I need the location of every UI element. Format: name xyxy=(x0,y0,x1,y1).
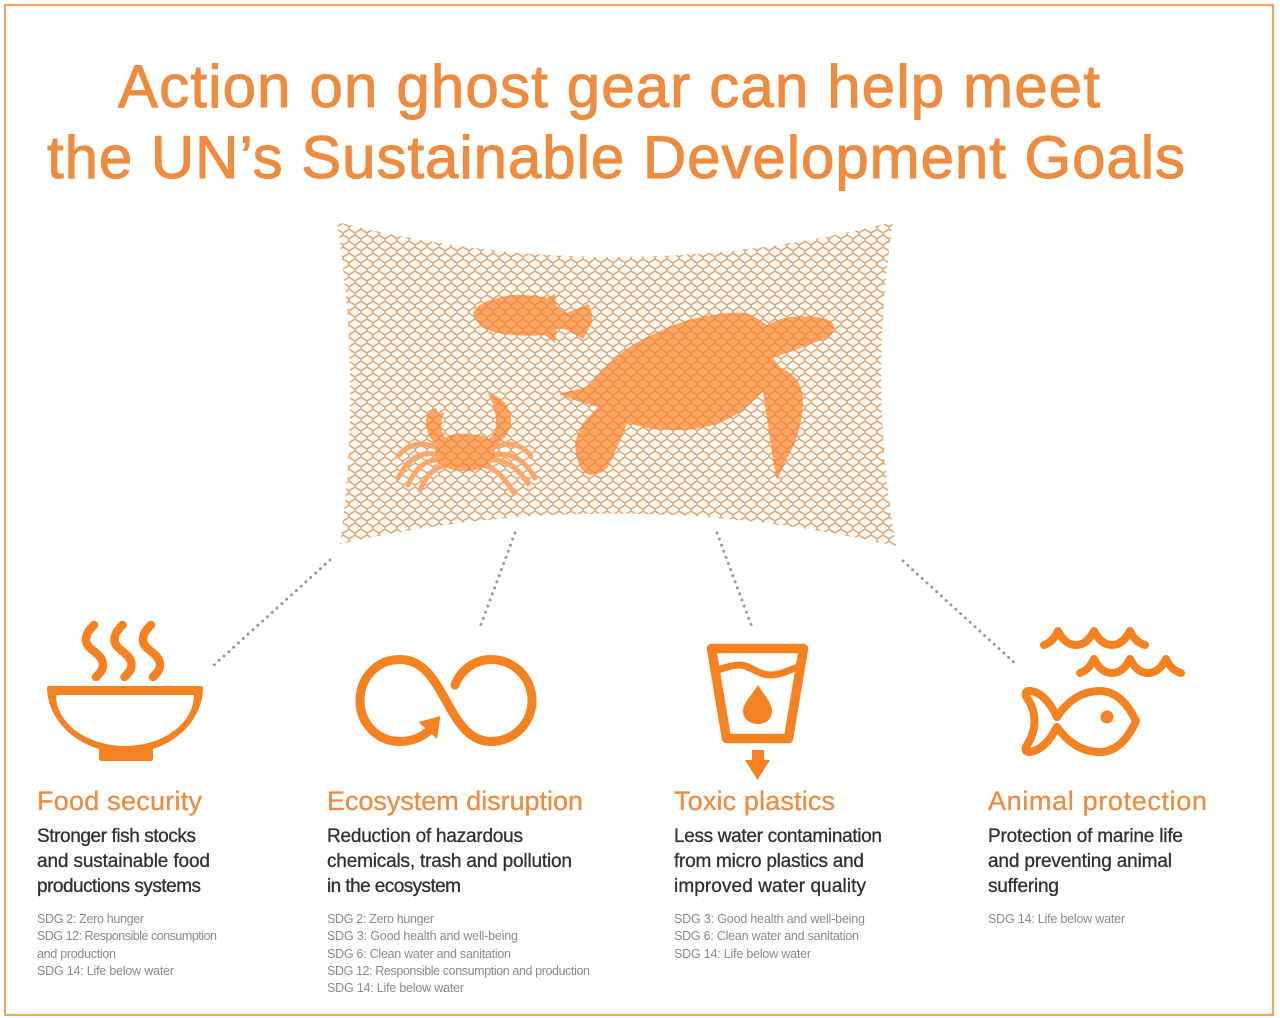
icon: small fish xyxy=(473,294,592,343)
dotted connector: food security xyxy=(214,560,330,665)
title: Action on ghost gear can help meet xyxy=(118,53,1100,120)
heading: Food security xyxy=(37,786,202,816)
dotted connector: toxic plastics xyxy=(717,533,752,627)
net over animals xyxy=(426,294,834,480)
description xyxy=(988,826,1183,897)
description: in the ecosystem xyxy=(327,876,461,897)
description: improved water quality xyxy=(674,876,866,897)
icon: crab xyxy=(398,393,535,493)
SDG list xyxy=(37,912,217,978)
SDG list xyxy=(327,912,590,995)
icon: steaming bowl xyxy=(47,625,203,761)
description: Stronger fish stocks xyxy=(37,826,196,847)
net illustration xyxy=(337,222,896,546)
heading: Toxic plastics xyxy=(674,786,835,816)
dotted connector: animal protection xyxy=(903,561,1018,666)
SDG list: SDG 6: Clean water and sanitation xyxy=(674,929,859,943)
SDG list: SDG 2: Zero hunger xyxy=(37,912,144,926)
SDG list: SDG 14: Life below water xyxy=(988,912,1125,926)
description: productions systems xyxy=(37,876,201,897)
description: Reduction of hazardous xyxy=(327,826,523,847)
SDG list: SDG 12: Responsible consumption and production xyxy=(327,964,590,978)
SDG list: SDG 12: Responsible consumption xyxy=(37,929,217,943)
SDG list: and production xyxy=(37,947,116,961)
panel: animal protection xyxy=(988,631,1207,926)
SDG list: SDG 3: Good health and well-being xyxy=(674,912,865,926)
icon: infinity loop with arrow xyxy=(360,660,532,742)
description: from micro plastics and xyxy=(674,851,864,872)
SDG list: SDG 3: Good health and well-being xyxy=(327,929,518,943)
description xyxy=(37,826,210,897)
title xyxy=(47,53,1185,191)
description: and sustainable food xyxy=(37,851,210,872)
description: and preventing animal xyxy=(988,851,1172,872)
description: suffering xyxy=(988,876,1059,897)
description: Less water contamination xyxy=(674,826,882,847)
icon: turtle xyxy=(558,313,834,480)
SDG list: SDG 2: Zero hunger xyxy=(327,912,434,926)
panel: toxic plastics xyxy=(674,648,882,961)
icon: fish under waves xyxy=(1026,631,1181,752)
icon: water cup with drop xyxy=(712,648,804,780)
panel: ecosystem disruption xyxy=(327,660,590,995)
description xyxy=(674,826,882,897)
SDG list: SDG 14: Life below water xyxy=(327,981,464,995)
heading: Ecosystem disruption xyxy=(327,786,583,816)
SDG list xyxy=(674,912,865,961)
SDG list: SDG 14: Life below water xyxy=(674,947,811,961)
description: chemicals, trash and pollution xyxy=(327,851,572,872)
title: the UN’s Sustainable Development Goals xyxy=(47,124,1185,191)
SDG list: SDG 6: Clean water and sanitation xyxy=(327,947,511,961)
SDG list: SDG 14: Life below water xyxy=(37,964,174,978)
panel: food security xyxy=(37,625,217,978)
description xyxy=(327,826,572,897)
heading: Animal protection xyxy=(988,786,1207,816)
dotted connector: ecosystem disruption xyxy=(480,533,515,627)
description: Protection of marine life xyxy=(988,826,1183,847)
